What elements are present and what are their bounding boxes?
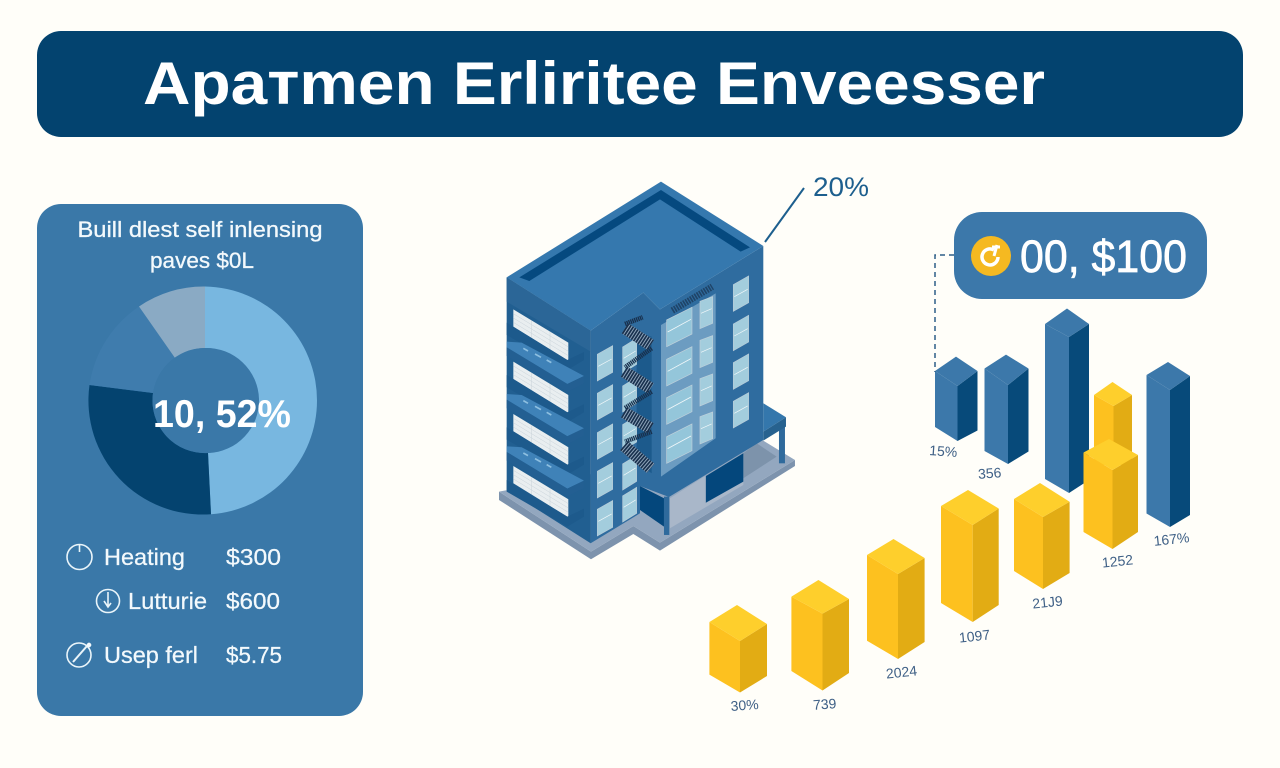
- bar value labels: 2024: [885, 662, 918, 682]
- yellow bar 5: [1014, 483, 1070, 589]
- legend row: usep ferl: Usep ferl: [104, 642, 198, 668]
- yellow bar chart: [709, 439, 1138, 692]
- building illustration: [499, 182, 795, 559]
- legend row: lutturie: [96, 588, 280, 614]
- bar value labels: 739: [812, 695, 837, 713]
- legend row: lutturie: Lutturie: [128, 588, 207, 614]
- canopy: [763, 403, 786, 463]
- legend row: heating: [67, 544, 281, 570]
- panel: budget breakdown: [37, 204, 363, 716]
- panel heading: Buill dlest self inlensing: [78, 217, 322, 242]
- blue bar 5: [1146, 362, 1190, 527]
- icon: coin: [971, 236, 1011, 276]
- window grid: left column: [597, 333, 652, 536]
- title banner: [37, 31, 1243, 137]
- callout value: 00, $100: [1020, 231, 1187, 282]
- bar value labels: 1252: [1101, 551, 1134, 571]
- blue bar 1: [935, 357, 978, 441]
- large window wall: [661, 293, 716, 477]
- dashed connector: [935, 255, 954, 372]
- legend row: usep ferl: $5.75: [226, 642, 282, 668]
- roof fascia shade: [507, 277, 591, 352]
- right and front walls: [591, 246, 763, 543]
- yellow bar 1: [709, 605, 767, 692]
- legend row: usep ferl: [67, 642, 282, 668]
- callout: 20%: 20%: [813, 172, 869, 202]
- yellow bar 2: [791, 580, 849, 690]
- blue bar 2: [984, 355, 1028, 464]
- bar value labels: [730, 442, 1190, 714]
- donut value: 10, 52%: [153, 393, 291, 436]
- callout: total value: [954, 212, 1207, 299]
- roof: [507, 182, 763, 331]
- ground floor: [640, 443, 777, 535]
- bar value labels: 21J9: [1032, 592, 1064, 612]
- base slab: [499, 437, 795, 559]
- bar value labels: 1097: [958, 626, 991, 646]
- panel heading: paves $0L: [150, 248, 254, 273]
- bar value labels: 15%: [929, 442, 958, 460]
- yellow bar 3: [867, 539, 925, 659]
- yellow bar 6: [1084, 439, 1138, 549]
- donut chart: [88, 286, 317, 515]
- fire escape stairs: [624, 317, 652, 468]
- bar value labels: 30%: [730, 696, 759, 714]
- bar value labels: 356: [977, 464, 1002, 482]
- legend row: heating: $300: [226, 544, 281, 570]
- balconies: [507, 309, 584, 527]
- title text: Apaтmen Erliritee Enveesser: [143, 50, 1045, 117]
- yellow bar 4: [941, 490, 999, 622]
- left wall: [507, 277, 591, 543]
- bar value labels: 167%: [1153, 529, 1190, 549]
- callout: 20%: [765, 172, 869, 242]
- yellow bar back: [1094, 382, 1132, 465]
- building sign: [672, 287, 712, 311]
- window grid: right column: [733, 276, 749, 428]
- legend row: lutturie: $600: [226, 588, 280, 614]
- legend row: heating: Heating: [104, 544, 185, 570]
- blue bar chart: [935, 308, 1190, 527]
- blue bar 3: [1045, 308, 1089, 493]
